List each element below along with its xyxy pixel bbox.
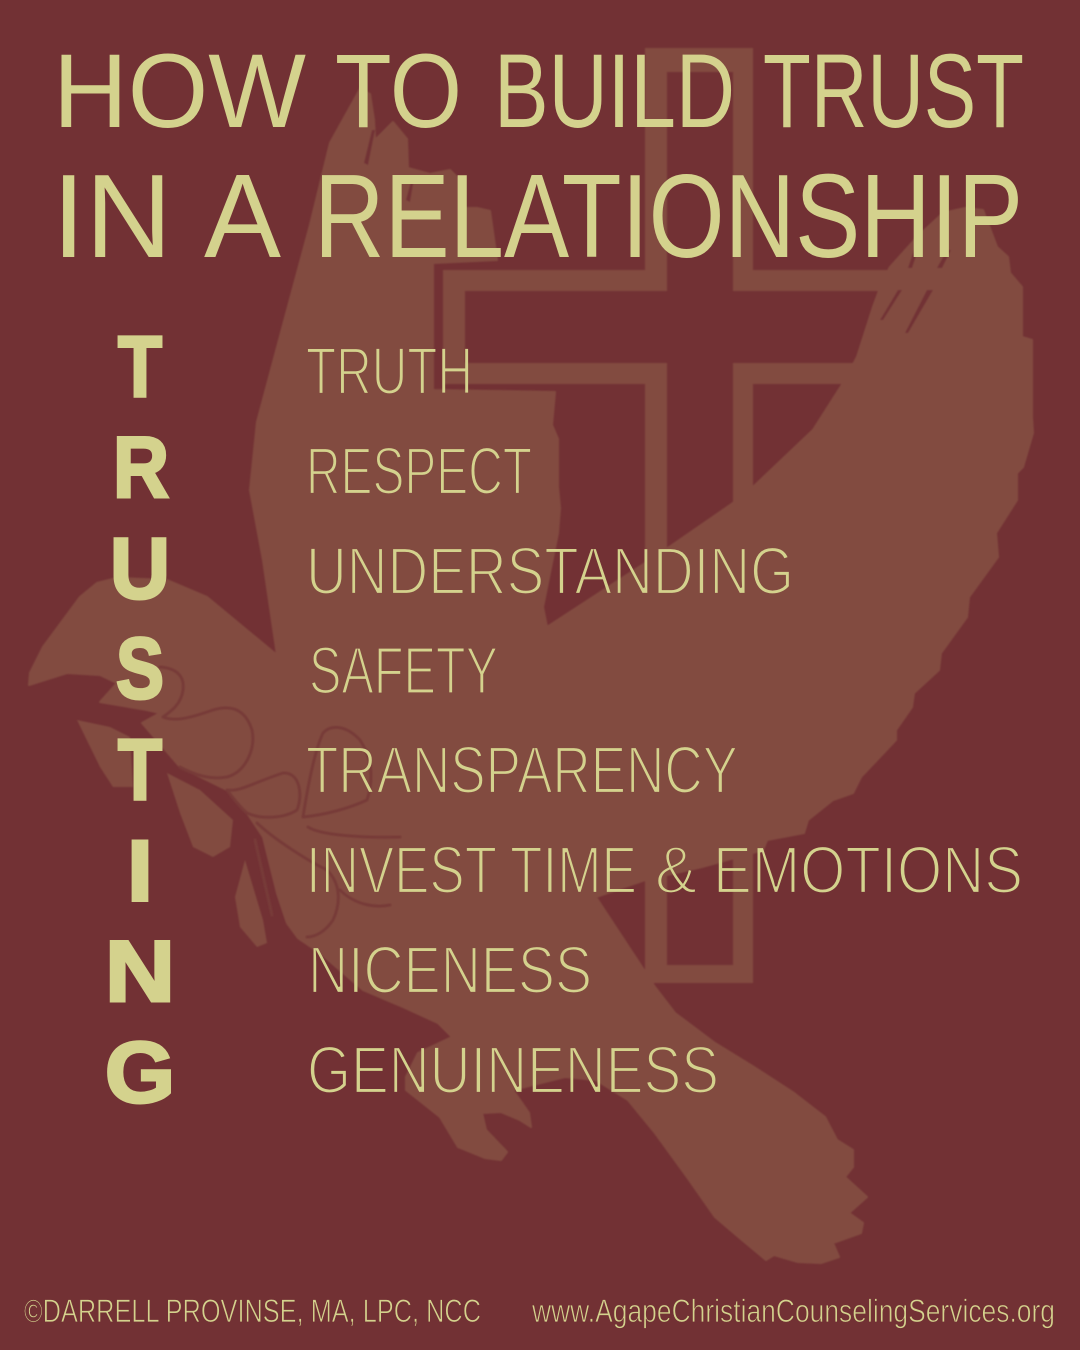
list of trust qualities xyxy=(306,334,1023,1108)
icon: ribbon lines xyxy=(160,667,400,937)
acronym column: TRUSTING: N xyxy=(105,924,175,1020)
acronym column: TRUSTING: U xyxy=(110,521,170,617)
item: transparency: TRANSPARENCY xyxy=(306,733,738,808)
title line 1: HOW xyxy=(53,33,306,150)
item: invest time and emotions xyxy=(306,833,1023,908)
item: genuineness: GENUINENESS xyxy=(307,1033,719,1108)
item: safety: SAFETY xyxy=(309,634,498,708)
title line 1: BUILD xyxy=(494,33,735,150)
title line 2 xyxy=(52,150,1023,283)
item: understanding: UNDERSTANDING xyxy=(306,534,794,609)
icon: wing feather slits xyxy=(364,130,951,333)
icon: olive branch leaves xyxy=(77,720,267,947)
item: invest time and emotions: EMOTIONS xyxy=(713,833,1023,908)
acronym column: TRUSTING: T xyxy=(118,722,162,818)
acronym column: TRUSTING xyxy=(105,320,175,1121)
title line 1 xyxy=(53,33,1024,150)
acronym column: TRUSTING: R xyxy=(113,420,169,516)
title line 2: A xyxy=(204,150,282,283)
item: niceness: NICENESS xyxy=(308,933,592,1008)
footer xyxy=(24,1293,1055,1329)
footer: copyright credit: ©DARRELL PROVINSE, MA, LPC, NCC xyxy=(24,1293,481,1329)
item: respect: RESPECT xyxy=(306,434,532,509)
title xyxy=(52,33,1024,283)
item: invest time and emotions: TIME xyxy=(510,833,637,908)
acronym column: TRUSTING: S xyxy=(116,621,164,717)
acronym column: TRUSTING: I xyxy=(127,824,153,920)
title line 2: IN xyxy=(52,150,172,283)
item: invest time and emotions: INVEST xyxy=(306,833,497,908)
item: invest time and emotions: & xyxy=(655,833,697,908)
icon: cross outline xyxy=(443,48,900,983)
title line 1: TO xyxy=(335,33,462,150)
acronym column: TRUSTING: G xyxy=(105,1025,175,1121)
acronym column: TRUSTING: T xyxy=(118,320,162,416)
item: truth: TRUTH xyxy=(306,334,473,409)
